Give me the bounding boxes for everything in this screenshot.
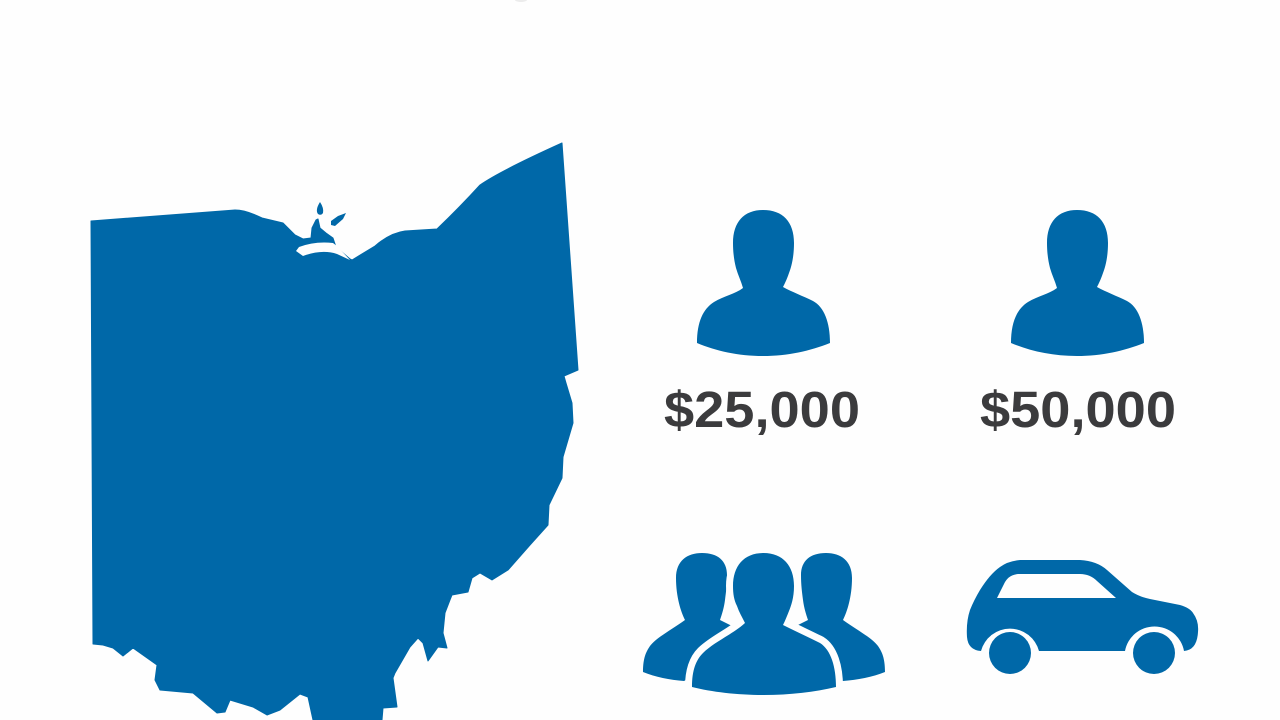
icon: person bbox=[1011, 210, 1144, 356]
value: $25,000 bbox=[664, 381, 860, 438]
back right person bbox=[788, 553, 885, 681]
stat: $25,000 bbox=[664, 210, 860, 438]
car body bbox=[967, 560, 1198, 651]
map: Ohio bbox=[91, 143, 578, 720]
rear wheel bbox=[989, 632, 1031, 674]
icon: group of people bbox=[643, 553, 885, 695]
front wheel bbox=[1133, 632, 1175, 674]
state silhouette bbox=[91, 143, 578, 720]
front person bbox=[692, 553, 836, 695]
icon: car bbox=[967, 560, 1198, 674]
value: $50,000 bbox=[980, 381, 1176, 438]
icon: person bbox=[697, 210, 830, 356]
back left person bbox=[643, 553, 740, 681]
Lake Erie island: drop bbox=[317, 202, 323, 215]
Sandusky Bay bbox=[296, 242, 350, 260]
clipped heading fragment bbox=[515, 0, 527, 2]
Lake Erie island: long bbox=[331, 213, 346, 226]
stat: $50,000 bbox=[980, 210, 1176, 438]
